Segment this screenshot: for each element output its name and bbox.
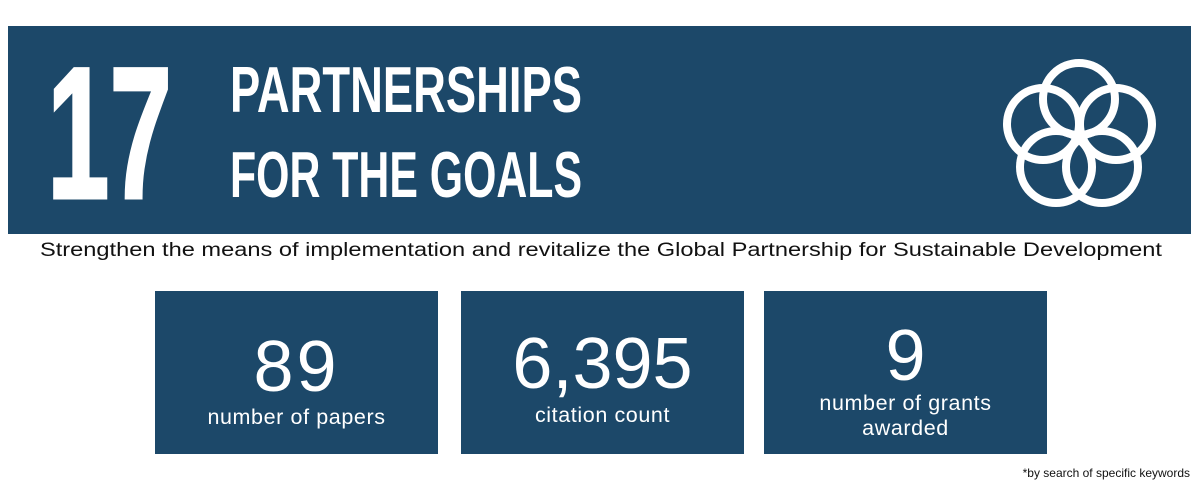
stat: citations [461,291,744,454]
subtitle: Strengthen the means of implementation and revitalize the Global Partnership for Sustainable Development [40,240,1163,261]
goal title: FOR THE GOALS [230,138,582,211]
stat: papers: 89 [253,327,340,407]
stat: grants: number of grants [819,391,992,415]
goal number: 17 [47,28,172,238]
goal title [230,53,582,211]
stat: papers [155,291,438,454]
stat: papers: number of papers [207,405,386,429]
icon: five rings [1007,63,1152,203]
stat: citations: citation count [535,403,670,427]
banner [8,26,1191,238]
goal title: PARTNERSHIPS [230,53,582,126]
stat: grants: awarded [862,416,949,440]
footnote: *by search of specific keywords [1023,466,1190,480]
stat: citations: 6,395 [512,324,693,404]
stat: grants [764,291,1047,454]
stat: grants: 9 [885,316,926,396]
